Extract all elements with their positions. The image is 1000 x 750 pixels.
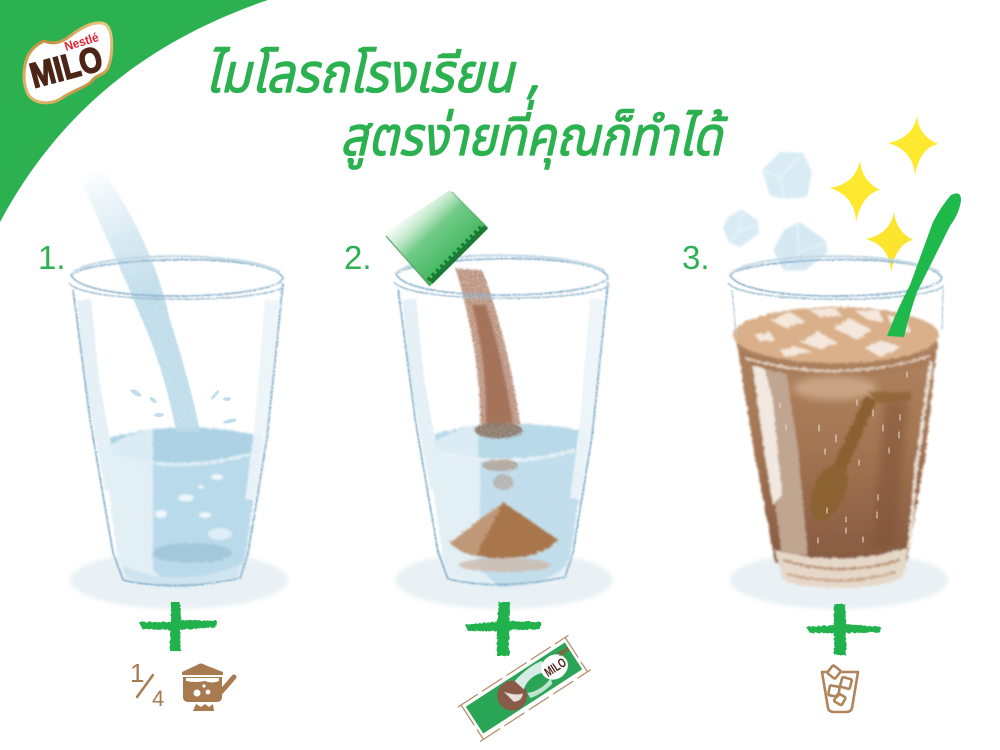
condensation drops xyxy=(780,372,907,543)
plus sign 1 xyxy=(139,602,217,651)
water body xyxy=(428,423,588,589)
green pack xyxy=(466,642,582,734)
panel: step 2 glass with powder xyxy=(385,190,613,609)
icon: milo sachet packet: 3in1 xyxy=(557,646,571,658)
falling powder stream xyxy=(455,268,520,425)
title xyxy=(205,36,728,180)
green stirring spoon xyxy=(887,193,961,337)
dissolved powder xyxy=(474,422,522,490)
panel: step 3 iced milo glass xyxy=(723,116,961,609)
title line 2: สูตรง่ายที่คุณก็ทำได้ xyxy=(340,99,728,180)
ice cube large xyxy=(773,222,828,271)
icon: kettle xyxy=(182,664,234,711)
water specks xyxy=(155,474,232,540)
title line 1: ไมโลรถโรงเรียน , xyxy=(205,36,540,117)
iced milo drink xyxy=(733,307,939,588)
ice cubes in drink xyxy=(755,308,912,357)
ice cube left xyxy=(762,152,812,199)
base of glass xyxy=(775,548,908,588)
logo: Nestle Milo: Nestlé xyxy=(63,30,100,54)
glass outline xyxy=(728,256,943,335)
table shadow xyxy=(730,551,948,609)
powder pile xyxy=(450,502,558,572)
drink surface xyxy=(733,307,939,363)
spoon inside the drink xyxy=(803,392,912,526)
glass outline xyxy=(394,255,609,585)
table shadow xyxy=(395,551,613,609)
left glass highlight xyxy=(754,365,808,555)
logo: Nestle Milo xyxy=(24,23,112,103)
step number 3: 3. xyxy=(682,239,710,276)
water body xyxy=(103,427,263,589)
one quarter label: 4 xyxy=(152,686,164,711)
right dark shade xyxy=(872,400,908,550)
ice cube small xyxy=(723,209,759,247)
sketched frame xyxy=(458,635,591,742)
foam cloud xyxy=(793,376,877,400)
icon: milo sachet packet xyxy=(458,635,591,742)
one quarter label xyxy=(130,658,164,711)
step number 2: 2. xyxy=(344,239,372,276)
swirl xyxy=(492,675,533,716)
water splashes xyxy=(130,388,237,424)
pack brand xyxy=(536,649,573,685)
table shadow xyxy=(70,551,288,609)
icon: milo sachet packet: MILO xyxy=(541,655,569,680)
milo sachet pouring xyxy=(385,190,488,286)
one quarter label: 1 xyxy=(130,658,144,688)
plus sign 2 xyxy=(465,602,541,656)
step number 1: 1. xyxy=(38,239,66,276)
plus sign 3 xyxy=(806,604,881,655)
panel: step 1 glass of water xyxy=(69,170,288,609)
green corner banner xyxy=(0,0,268,222)
pouring water stream xyxy=(76,170,200,432)
sparkle stars xyxy=(830,116,938,272)
icon: iced drink xyxy=(822,665,858,712)
logo: Nestle Milo: MILO xyxy=(26,39,107,96)
glass outline xyxy=(69,256,284,586)
right highlight xyxy=(909,362,931,548)
